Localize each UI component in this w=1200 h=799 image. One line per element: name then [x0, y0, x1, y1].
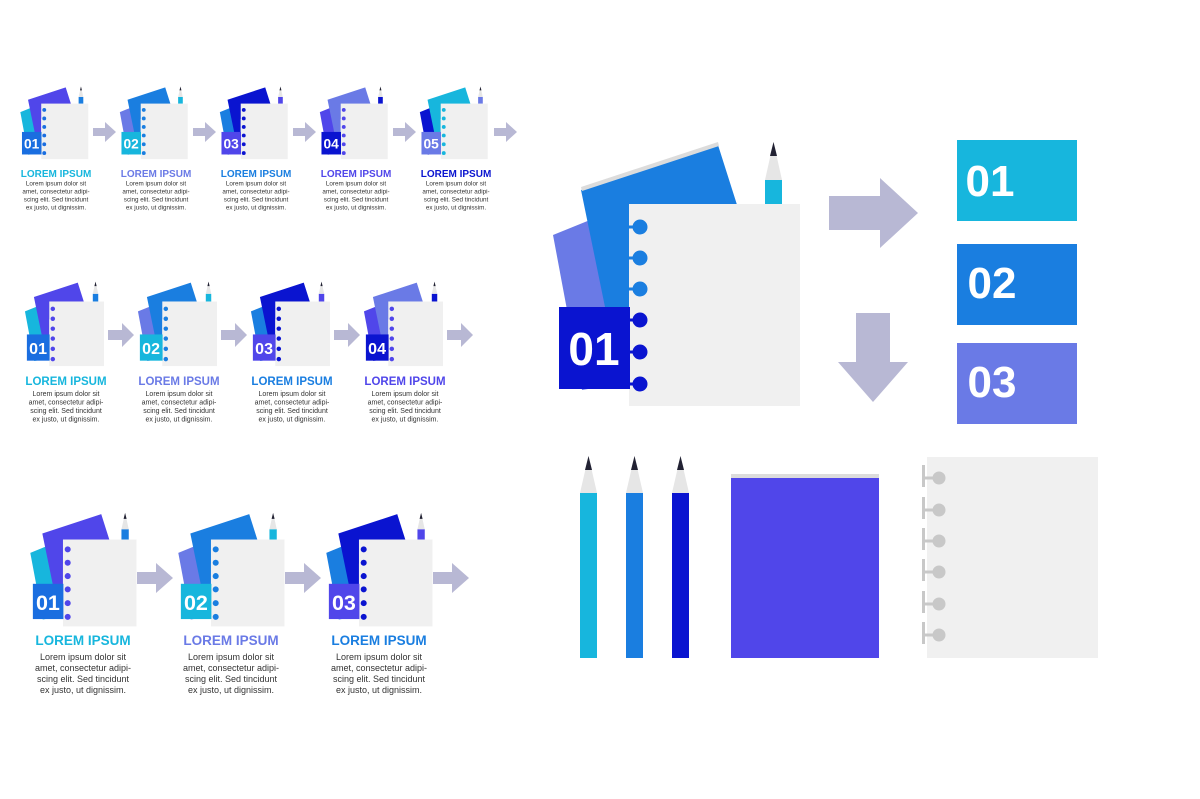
row 1 texts: amet, consectetur adipi-	[22, 188, 90, 196]
row 1 texts: Lorem ipsum dolor sit	[226, 180, 286, 188]
row 1 texts: Lorem ipsum dolor sit	[126, 180, 186, 188]
row 2 texts: scing elit. Sed tincidunt	[369, 408, 441, 415]
row 1 texts: ex justo, ut dignissim.	[26, 204, 86, 212]
row 3 texts: LOREM IPSUM	[35, 633, 131, 648]
step 2-3: 03	[255, 341, 273, 358]
row 1 texts: LOREM IPSUM	[121, 169, 191, 180]
row 3 texts: amet, consectetur adipi-	[183, 663, 279, 673]
row 2 texts: scing elit. Sed tincidunt	[143, 408, 215, 415]
row 1 arrows	[93, 122, 517, 142]
row 1 texts: Lorem ipsum dolor sit	[426, 180, 486, 188]
step 2-1	[25, 282, 104, 366]
row 3 texts: LOREM IPSUM	[331, 633, 427, 648]
box 03: 03	[968, 358, 1016, 407]
row 1 texts: scing elit. Sed tincidunt	[24, 196, 88, 204]
step 1-4: 04	[323, 137, 339, 152]
row 3 texts: amet, consectetur adipi-	[331, 663, 427, 673]
step 1-1: 01	[24, 137, 40, 152]
row 2 texts: LOREM IPSUM	[25, 376, 107, 388]
row 3 texts: scing elit. Sed tincidunt	[333, 674, 426, 684]
box 03	[957, 343, 1077, 424]
row 1 texts: amet, consectetur adipi-	[322, 188, 390, 196]
step 1-2: 02	[123, 137, 139, 152]
row 3 texts: ex justo, ut dignissim.	[336, 685, 422, 695]
step 3-1: 01	[36, 591, 60, 615]
row 3 texts: scing elit. Sed tincidunt	[37, 674, 130, 684]
row 2 texts: ex justo, ut dignissim.	[259, 416, 326, 424]
box 01: 01	[966, 157, 1014, 206]
row 3 texts: Lorem ipsum dolor sit	[40, 652, 127, 662]
row 1 texts: amet, consectetur adipi-	[122, 188, 190, 196]
row 1 texts: ex justo, ut dignissim.	[426, 204, 486, 212]
row 2 texts: LOREM IPSUM	[251, 376, 333, 388]
step 2-1: 01	[29, 341, 47, 358]
step 1-5	[420, 87, 488, 159]
step 1-3: 03	[223, 137, 239, 152]
row 3 texts: amet, consectetur adipi-	[35, 663, 131, 673]
step 1-4	[320, 87, 388, 159]
step 2-3	[251, 282, 330, 366]
row 2 texts: LOREM IPSUM	[138, 376, 220, 388]
row 2 texts: ex justo, ut dignissim.	[146, 416, 213, 424]
row 3 texts: scing elit. Sed tincidunt	[185, 674, 278, 684]
row 2 texts: amet, consectetur adipi-	[29, 400, 104, 406]
row 1 texts	[21, 169, 491, 212]
row 1: five steps	[20, 87, 517, 212]
pencil cyan	[580, 456, 597, 658]
row 1 texts: Lorem ipsum dolor sit	[326, 180, 386, 188]
big notebook 01: 01	[568, 323, 620, 375]
row 3 texts: ex justo, ut dignissim.	[188, 685, 274, 695]
step 3-2	[178, 513, 284, 626]
row 1 texts: ex justo, ut dignissim.	[226, 204, 286, 212]
row 2 texts: Lorem ipsum dolor sit	[372, 391, 439, 398]
row 2 texts: Lorem ipsum dolor sit	[33, 391, 100, 398]
arrow: down	[838, 313, 908, 402]
step 3-1	[30, 513, 136, 626]
step 1-3	[220, 87, 288, 159]
row 1 texts: LOREM IPSUM	[21, 169, 91, 180]
row 1 texts: amet, consectetur adipi-	[422, 188, 490, 196]
step 2-2	[138, 282, 217, 366]
pencil blue	[626, 456, 643, 658]
step 1-5: 05	[423, 137, 439, 152]
row 3 texts: LOREM IPSUM	[183, 633, 279, 648]
row 1 texts: LOREM IPSUM	[321, 169, 391, 180]
step 2-4: 04	[368, 341, 386, 358]
number boxes	[957, 140, 1077, 424]
row 2 texts: scing elit. Sed tincidunt	[256, 408, 328, 415]
pencil dark blue	[672, 456, 689, 658]
row 1 texts: amet, consectetur adipi-	[222, 188, 290, 196]
paper sheet	[922, 457, 1098, 658]
row 2 arrows	[108, 323, 473, 347]
row 3 texts	[35, 633, 427, 695]
row 1 texts: scing elit. Sed tincidunt	[224, 196, 288, 204]
row 1 texts: LOREM IPSUM	[221, 169, 291, 180]
row 1 texts: LOREM IPSUM	[421, 169, 491, 180]
row 2 texts: amet, consectetur adipi-	[368, 400, 443, 406]
row 2 texts: Lorem ipsum dolor sit	[259, 391, 326, 398]
row 1 texts: ex justo, ut dignissim.	[126, 204, 186, 212]
row 2 texts: amet, consectetur adipi-	[255, 400, 330, 406]
step 3-3	[326, 513, 432, 626]
step 3-3: 03	[332, 591, 356, 615]
pencils	[580, 456, 689, 658]
row 2 texts: ex justo, ut dignissim.	[33, 416, 100, 424]
row 3 texts: Lorem ipsum dolor sit	[336, 652, 423, 662]
row 2 texts	[25, 376, 446, 424]
row 1 texts: scing elit. Sed tincidunt	[424, 196, 488, 204]
box 02: 02	[968, 259, 1016, 308]
row 3 texts: ex justo, ut dignissim.	[40, 685, 126, 695]
step 1-2	[120, 87, 188, 159]
row 1 texts: Lorem ipsum dolor sit	[26, 180, 86, 188]
row 2 texts: Lorem ipsum dolor sit	[146, 391, 213, 398]
row 3 arrows	[137, 563, 469, 593]
row 3 texts: Lorem ipsum dolor sit	[188, 652, 275, 662]
row 2: four steps	[25, 282, 473, 424]
step 1-1	[20, 87, 88, 159]
step 2-4	[364, 282, 443, 366]
box 01	[957, 140, 1077, 221]
row 1 texts: scing elit. Sed tincidunt	[124, 196, 188, 204]
step 3-2: 02	[184, 591, 208, 615]
book	[731, 474, 879, 658]
box 02	[957, 244, 1077, 325]
row 1 texts: scing elit. Sed tincidunt	[324, 196, 388, 204]
step 2-2: 02	[142, 341, 160, 358]
arrow: right	[829, 178, 918, 248]
row 3: three steps	[30, 513, 469, 695]
row 2 texts: amet, consectetur adipi-	[142, 400, 217, 406]
row 2 texts: scing elit. Sed tincidunt	[30, 408, 102, 415]
row 1 texts: ex justo, ut dignissim.	[326, 204, 386, 212]
row 2 texts: ex justo, ut dignissim.	[372, 416, 439, 424]
big notebook 01	[553, 142, 800, 406]
row 2 texts: LOREM IPSUM	[364, 376, 446, 388]
